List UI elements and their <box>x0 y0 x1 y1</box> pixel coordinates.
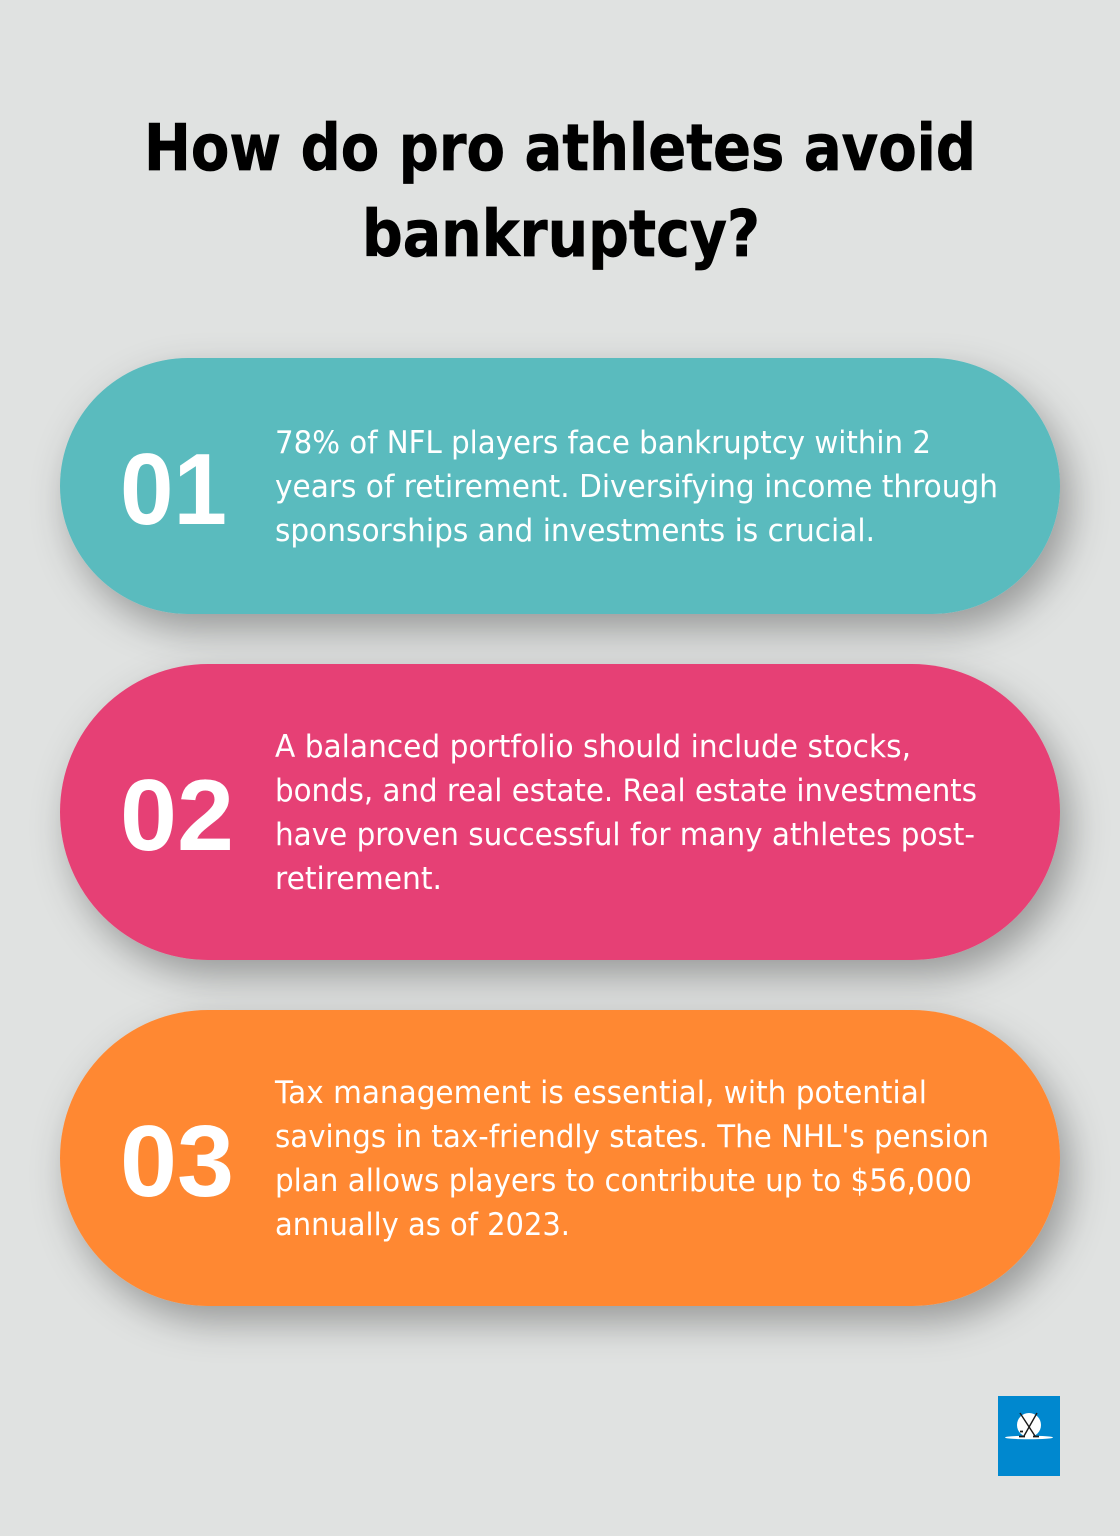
card 03 text: Tax management is essential, with potential <box>274 1075 927 1111</box>
card 03 text: plan allows players to contribute up to $56,000 <box>275 1163 972 1199</box>
title: bankruptcy? <box>362 198 760 272</box>
card 02 number: 02 <box>120 760 234 872</box>
card 01 text: sponsorships and investments is crucial. <box>275 513 875 549</box>
card 02 text: retirement. <box>275 861 442 897</box>
panel: card 03 <box>60 1010 1060 1306</box>
title: How do pro athletes avoid <box>144 112 976 186</box>
icon: hockey logo <box>998 1396 1060 1476</box>
card 03 number: 03 <box>120 1106 234 1218</box>
card 02 text: A balanced portfolio should include stocks, <box>275 729 911 765</box>
card 03 text: annually as of 2023. <box>275 1207 570 1243</box>
panel: card 02 <box>60 664 1060 960</box>
card 02 text: have proven successful for many athletes post- <box>275 817 975 853</box>
card 01 background <box>60 358 1060 614</box>
card 01 text: years of retirement. Diversifying income through <box>275 469 998 505</box>
card 02 background <box>60 664 1060 960</box>
title <box>144 112 976 272</box>
card 03 text: savings in tax-friendly states. The NHL's pension <box>275 1119 989 1155</box>
card 03 background <box>60 1010 1060 1306</box>
card 02 text <box>275 729 977 897</box>
card 01 number: 01 <box>120 434 227 546</box>
card 01 text: 78% of NFL players face bankruptcy within 2 <box>275 425 931 461</box>
panel: card 01 <box>60 358 1060 614</box>
card 03 text <box>274 1075 989 1243</box>
card 02 text: bonds, and real estate. Real estate investments <box>275 773 977 809</box>
card 01 text <box>275 425 998 549</box>
